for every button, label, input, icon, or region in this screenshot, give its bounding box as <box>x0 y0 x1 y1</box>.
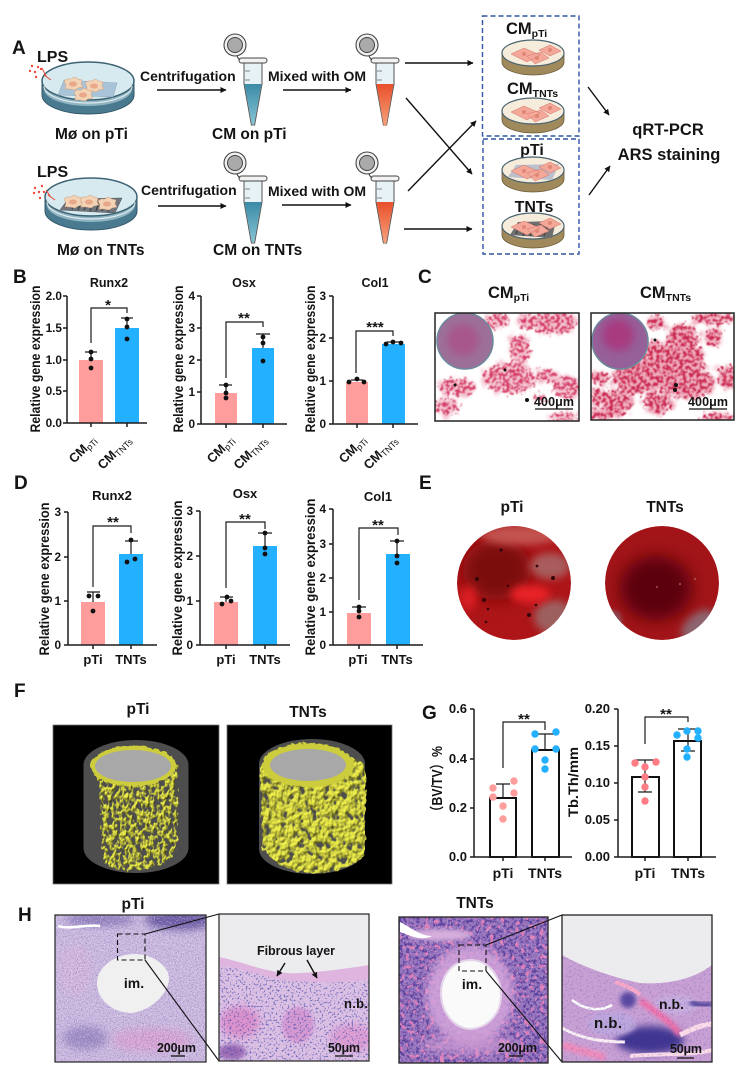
chart: Osx B <box>171 276 287 473</box>
data points and error bars <box>352 539 404 619</box>
axes: 2.0 <box>46 289 62 303</box>
data points and error bars <box>220 531 272 606</box>
text: readouts: ARS staining <box>618 146 720 164</box>
icon: blue tube bottom <box>224 152 267 243</box>
label: CM TNTs: CM <box>507 80 533 98</box>
heading TNTs: TNTs <box>456 895 494 912</box>
label n.b. right: n.b. <box>659 996 684 1012</box>
scale bar 50 um: 50μm <box>670 1042 702 1056</box>
bars <box>79 328 139 423</box>
panel A: experimental workflow <box>12 16 720 259</box>
x labels: CM <box>94 447 119 472</box>
axes: 3 <box>188 321 195 335</box>
x labels: TNTs <box>671 865 705 881</box>
x labels: TNTs <box>528 865 562 881</box>
y axis label: Tb.Th/mm <box>566 747 581 817</box>
significance bracket: ** <box>238 310 250 327</box>
y axis label: Relative gene expression <box>37 502 52 656</box>
data points pTi <box>489 777 518 823</box>
significance bracket <box>356 319 393 373</box>
x labels: CM <box>230 447 255 472</box>
data points and error bars <box>347 340 403 384</box>
y axis label: Relative gene expression <box>303 498 318 656</box>
significance bracket: ** <box>518 711 530 728</box>
label: Mixed with OM top: Mixed with OM <box>268 68 366 84</box>
zoom lines pTi <box>145 914 219 1061</box>
significance bracket: *** <box>366 319 384 336</box>
text: readouts: qRT-PCR <box>632 121 704 139</box>
LPS label bottom: LPS <box>37 164 68 181</box>
arrows to fibrous layer <box>277 960 317 978</box>
arrow: to TNTs group bottom <box>404 228 472 230</box>
axes: 3 <box>186 504 193 518</box>
x labels: pTi <box>216 652 236 667</box>
panel letter E: E <box>419 473 432 494</box>
axes: 0.6 <box>449 701 467 716</box>
significance bracket <box>503 711 545 768</box>
x labels: TNTs <box>379 436 401 459</box>
chart title: Col1 <box>361 276 389 290</box>
micro-CT TNTs <box>227 725 392 884</box>
y axis label: Relative gene expression <box>171 286 186 432</box>
arrow: crossing to pTi group <box>406 98 472 174</box>
chart: Runx2 D <box>37 488 157 667</box>
icon: orange tube bottom <box>356 152 399 243</box>
label Fibrous layer: Fibrous layer <box>257 944 335 958</box>
heading pTi: pTi <box>127 701 149 718</box>
error bars <box>496 734 555 798</box>
y axis label: Relative gene expression <box>303 286 318 432</box>
chart: BV/TV <box>429 701 572 881</box>
arrow: dish to tube top <box>157 89 226 91</box>
axes: 1 <box>186 594 193 608</box>
panel letter A: A <box>12 38 26 59</box>
label: pTi group: pTi <box>520 142 544 159</box>
significance bracket <box>359 517 398 600</box>
icon: macrophage dish on TNTs <box>45 178 137 230</box>
x labels: pTi <box>348 652 368 667</box>
panel letter F: F <box>14 681 26 702</box>
bars <box>490 750 559 857</box>
axes: 0.0 <box>449 849 467 864</box>
axes: 0.20 <box>585 701 610 716</box>
label: Centrifugation bottom: Centrifugation <box>141 182 237 198</box>
y axis label: Relative gene expression <box>170 500 185 656</box>
panel letter B: B <box>13 267 27 288</box>
icon: osteoblast dish CM TNTs <box>502 98 564 133</box>
micrograph CM pTi <box>434 312 582 422</box>
bars <box>347 554 410 645</box>
x labels <box>66 432 135 473</box>
heading CM TNTs: CM <box>640 284 666 302</box>
significance bracket: ** <box>107 514 119 531</box>
label im.: im. <box>462 976 482 992</box>
label: CM on pTi: CM on pTi <box>212 126 287 143</box>
bars <box>81 554 143 645</box>
bars <box>214 546 277 645</box>
axes: 0 <box>54 638 61 652</box>
axes: 0.05 <box>585 812 610 827</box>
axes: 2 <box>186 549 193 563</box>
axes: 3 <box>54 505 61 519</box>
zoom lines TNTs <box>486 915 562 1062</box>
x labels: CM <box>66 441 91 466</box>
x labels: pTi <box>222 437 238 452</box>
significance bracket: * <box>105 297 111 314</box>
x labels: CM <box>336 441 361 466</box>
stained disc TNTs <box>602 526 720 646</box>
heading CM pTi: CM <box>488 284 514 302</box>
panel letter C: C <box>418 267 432 288</box>
axes <box>188 289 287 431</box>
scale bar 200 um: 200μm <box>157 1041 196 1055</box>
histology overview TNTs <box>399 917 548 1063</box>
icon: orange tube top <box>356 34 399 126</box>
panel C: ARS staining micrographs <box>418 267 737 422</box>
x labels <box>204 432 271 473</box>
significance bracket: ** <box>660 706 672 723</box>
chart title: Runx2 <box>90 276 128 290</box>
x labels <box>336 432 401 473</box>
axes: 0 <box>188 417 195 431</box>
axes: 0.10 <box>585 775 610 790</box>
axes: 4 <box>188 289 195 303</box>
icon: blue tube top <box>224 34 267 125</box>
axes: 0 <box>319 417 326 431</box>
significance bracket <box>91 297 127 343</box>
axes: 3 <box>319 289 326 303</box>
axes: 0.2 <box>449 800 467 815</box>
label: M-phi on pTi: Mø on pTi <box>55 126 128 143</box>
x labels <box>216 652 281 667</box>
arrow: blue tube to orange tube bottom <box>282 204 351 206</box>
zoom region box <box>118 934 145 960</box>
chart title: Osx <box>233 486 258 501</box>
label: CM pTi: pTi <box>532 28 547 40</box>
axes <box>46 289 147 430</box>
significance bracket <box>93 514 131 587</box>
dashed box: substrate groups <box>483 139 579 254</box>
axes <box>319 289 418 431</box>
dashed box: CM groups <box>482 16 579 136</box>
stained disc pTi <box>457 525 574 640</box>
micrograph CM TNTs <box>586 312 737 421</box>
label n.b. left: n.b. <box>594 1015 622 1032</box>
x labels <box>348 652 413 667</box>
x labels: pTi <box>493 865 513 881</box>
chart: Runx2 B <box>28 276 147 473</box>
icon: LPS particles bottom <box>33 185 55 200</box>
axes: 0.4 <box>449 751 468 766</box>
axes: 4 <box>319 502 326 516</box>
bars <box>632 741 701 857</box>
axes: 2 <box>319 331 326 345</box>
axes <box>186 504 290 652</box>
icon: osteoblast dish pTi <box>502 157 564 192</box>
label im.: im. <box>124 975 144 991</box>
data points TNTs <box>531 728 560 773</box>
chart: Osx D <box>170 486 290 667</box>
heading TNTs: TNTs <box>289 704 327 721</box>
histology inset pTi <box>218 914 374 1061</box>
scale bar 200 um: 200μm <box>498 1041 537 1055</box>
axes: 1.5 <box>46 321 62 335</box>
axes: 2 <box>319 571 326 585</box>
panel F: micro-CT reconstructions <box>14 681 392 884</box>
panel letter D: D <box>14 473 28 494</box>
axes: 1.0 <box>46 353 62 367</box>
heading CM TNTs: TNTs <box>666 292 691 304</box>
icon: osteoblast dish CM pTi <box>502 40 564 75</box>
y axis label: Relative gene expression <box>28 286 43 432</box>
arrow: dish to tube bottom <box>158 205 226 207</box>
axes <box>319 502 423 652</box>
arrow: to readout bottom <box>589 166 610 195</box>
data points and error bars <box>219 334 270 400</box>
panel E: whole-disc ARS staining <box>419 473 720 646</box>
panel H: histology <box>18 895 712 1063</box>
panel letter G: G <box>422 703 437 724</box>
arrow: blue tube to orange tube top <box>283 89 351 91</box>
x labels: pTi <box>635 865 655 881</box>
axes: 1 <box>188 385 195 399</box>
axes: 1 <box>319 374 326 388</box>
label n.b.: n.b. <box>344 996 368 1011</box>
x labels <box>83 652 147 667</box>
panel letter H: H <box>18 905 32 926</box>
LPS label top: LPS <box>37 49 68 66</box>
x labels: TNTs <box>249 652 281 667</box>
x labels: TNTs <box>249 436 271 459</box>
axes: 0 <box>319 638 326 652</box>
significance bracket: ** <box>372 517 384 534</box>
label: Centrifugation top: Centrifugation <box>140 68 236 84</box>
histology inset TNTs <box>562 915 712 1062</box>
significance bracket <box>226 310 263 378</box>
label: Mixed with OM bottom: Mixed with OM <box>268 183 366 199</box>
label: CM TNTs: TNTs <box>533 88 558 100</box>
icon: LPS particles top <box>29 65 51 80</box>
axes <box>585 701 716 864</box>
x labels <box>635 865 705 881</box>
arrow: to CM group top <box>405 62 473 64</box>
x labels: pTi <box>83 652 103 667</box>
icon: osteoblast dish TNTs <box>502 213 564 248</box>
axes: 0.5 <box>46 384 62 398</box>
label: TNTs group: TNTs <box>515 199 554 216</box>
icon: macrophage dish on pTi <box>42 62 134 114</box>
data points and error bars <box>85 317 133 370</box>
x labels: CM <box>204 441 229 466</box>
panel B: bar charts CM groups <box>13 267 418 473</box>
chart title: Col1 <box>364 489 392 504</box>
bars <box>346 344 405 424</box>
panel D: bar charts substrate groups <box>14 473 423 667</box>
axes <box>449 701 572 864</box>
label: CM pTi: CM <box>506 20 532 38</box>
label: CM on TNTs: CM on TNTs <box>213 242 302 259</box>
data points pTi <box>631 758 660 805</box>
heading TNTs: TNTs <box>646 499 684 516</box>
scale bar 50 um: 50μm <box>328 1041 360 1055</box>
bars <box>215 348 274 424</box>
panel G: bone morphometry charts <box>422 701 716 881</box>
x labels: TNTs <box>381 652 413 667</box>
axes: 0 <box>186 638 193 652</box>
histology overview pTi <box>55 910 215 1062</box>
arrow: crossing to CM group <box>408 121 476 191</box>
significance bracket <box>226 511 265 588</box>
scale bar 400 um: 400μm <box>688 395 728 409</box>
x labels <box>493 865 562 881</box>
zoom region box <box>459 945 486 971</box>
axes: 0.0 <box>46 416 62 430</box>
label: M-phi on TNTs: Mø on TNTs <box>57 242 145 259</box>
error bars <box>635 729 698 792</box>
x labels: CM <box>360 447 385 472</box>
significance bracket: ** <box>239 511 251 528</box>
axes: 2 <box>188 353 195 367</box>
x labels: pTi <box>84 437 100 452</box>
axes: 2 <box>54 550 61 564</box>
arrow: to readout top <box>588 87 609 115</box>
data points and error bars <box>87 538 138 613</box>
axes: 0.15 <box>585 738 610 753</box>
chart: Tb.Th <box>566 701 716 881</box>
heading CM pTi: pTi <box>514 292 529 304</box>
chart: Col1 B <box>303 276 418 473</box>
chart title: Runx2 <box>92 488 132 503</box>
significance bracket <box>645 706 688 744</box>
axes: 3 <box>319 537 326 551</box>
heading pTi: pTi <box>501 499 523 516</box>
chart title: Osx <box>232 276 256 290</box>
x labels: pTi <box>354 437 370 452</box>
x labels: TNTs <box>115 652 147 667</box>
scale bar 400 um: 400μm <box>534 395 574 409</box>
axes: 1 <box>319 605 326 619</box>
text: readouts <box>618 121 720 164</box>
axes <box>54 505 157 652</box>
axes: 1 <box>54 594 61 608</box>
heading pTi: pTi <box>122 896 144 913</box>
axes: 0.00 <box>585 849 610 864</box>
data points TNTs <box>673 727 702 761</box>
micro-CT pTi <box>53 725 219 884</box>
chart: Col1 D <box>303 489 423 667</box>
y axis label: （BV/TV）% <box>429 746 446 818</box>
x labels: TNTs <box>113 436 135 459</box>
